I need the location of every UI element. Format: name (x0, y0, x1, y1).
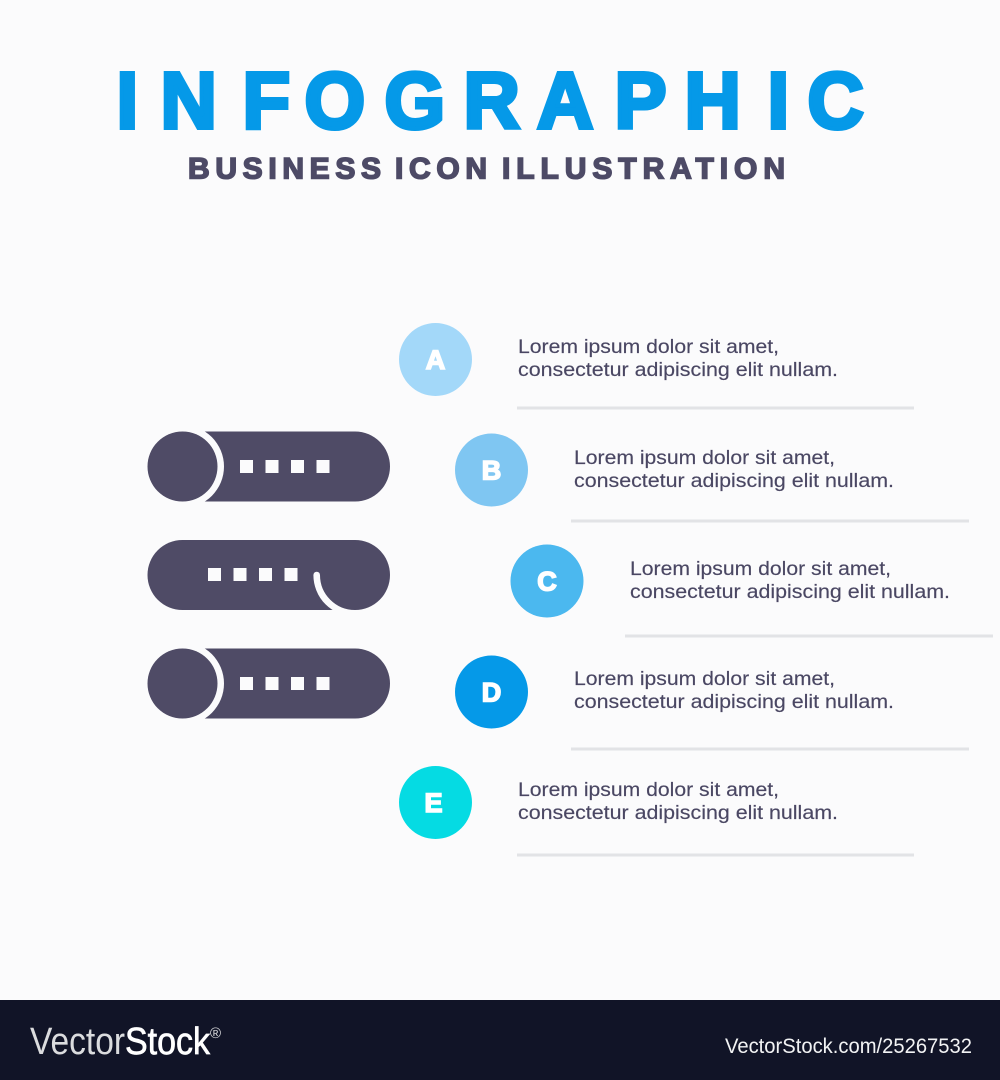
badge D (455, 656, 528, 728)
subtitle: ICON (395, 152, 487, 186)
text B: Lorem ipsum dolor sit amet, (574, 447, 835, 469)
badge B: B (482, 456, 501, 486)
subtitle: BUSINESS (188, 152, 381, 186)
badge A: A (426, 345, 445, 375)
title: INFOGRAPHIC (116, 56, 864, 145)
badge A (399, 323, 472, 396)
text D: Lorem ipsum dolor sit amet, (574, 668, 835, 690)
badge E: E (424, 788, 443, 818)
text A: consectetur adipiscing elit nullam. (518, 359, 838, 381)
text C (630, 558, 950, 603)
footer logo (30, 1021, 211, 1063)
text E: Lorem ipsum dolor sit amet, (518, 779, 779, 801)
toggle 1 (141, 425, 390, 508)
text A: Lorem ipsum dolor sit amet, (518, 336, 779, 358)
text E (518, 779, 838, 824)
toggle 2 (148, 540, 390, 618)
footer bar (0, 1000, 1000, 1080)
badge B (455, 434, 528, 506)
item C (510, 544, 993, 638)
text D (574, 668, 894, 713)
item A (399, 323, 914, 410)
item E (399, 766, 914, 856)
badge C: C (537, 566, 557, 596)
badge C (510, 544, 584, 618)
text C: Lorem ipsum dolor sit amet, (630, 558, 891, 580)
footer id: VectorStock.com/25267532 (725, 1035, 972, 1058)
icon: three toggle sliders (141, 425, 390, 725)
text B (574, 447, 894, 492)
subtitle (188, 152, 785, 186)
badge E (399, 766, 472, 839)
footer logo: Vector (30, 1021, 125, 1063)
subtitle: ILLUSTRATION (502, 152, 785, 186)
footer logo: Stock (125, 1021, 211, 1063)
item B (455, 434, 969, 522)
text B: consectetur adipiscing elit nullam. (574, 470, 894, 492)
badge D: D (482, 678, 501, 708)
item D (455, 656, 969, 750)
text D: consectetur adipiscing elit nullam. (574, 691, 894, 713)
text C: consectetur adipiscing elit nullam. (630, 581, 950, 603)
text A (518, 336, 838, 381)
text E: consectetur adipiscing elit nullam. (518, 802, 838, 824)
registered mark: ® (210, 1025, 221, 1042)
toggle 3 (141, 642, 390, 725)
